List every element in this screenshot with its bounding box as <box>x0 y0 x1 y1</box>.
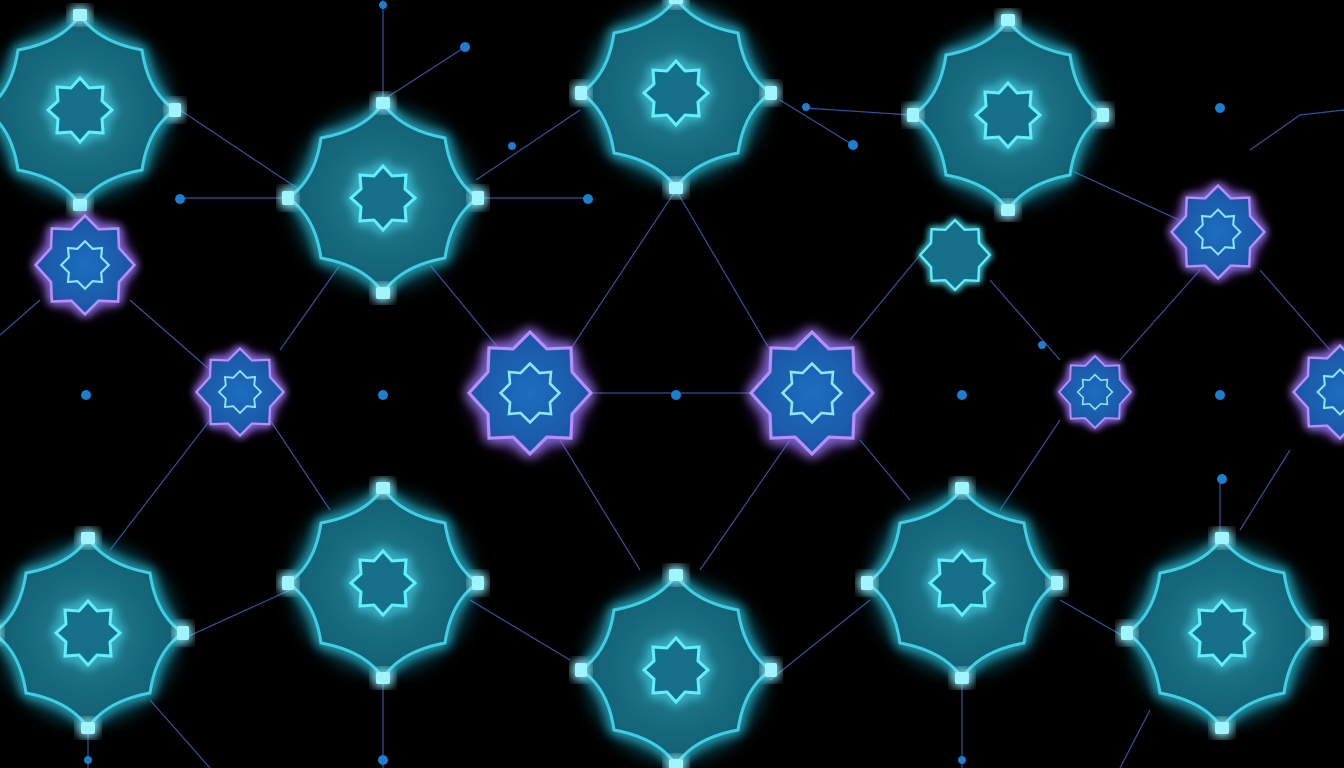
purple stars <box>36 186 1344 454</box>
small teal star <box>920 220 990 290</box>
